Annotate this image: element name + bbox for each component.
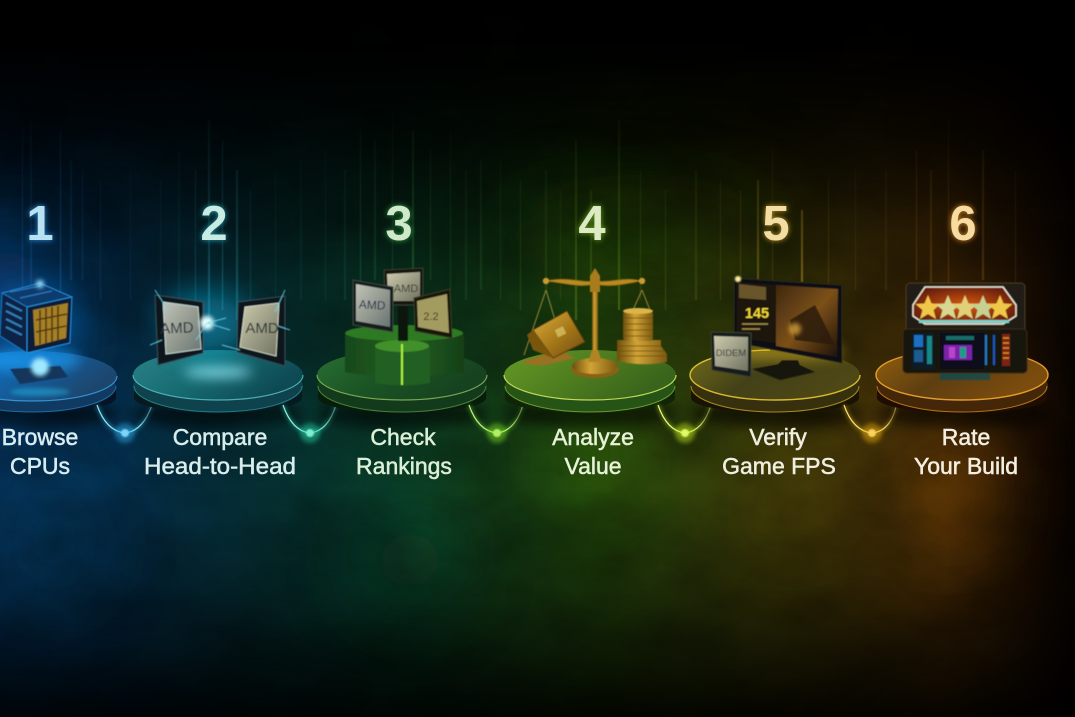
icon: podium with ranked chips — [345, 268, 464, 386]
number 2: 2 — [200, 197, 228, 251]
icon: star rating build panel — [903, 283, 1027, 380]
number 5: 5 — [762, 197, 790, 251]
step 6: Your Build — [914, 453, 1018, 479]
platform 5 — [689, 350, 861, 428]
icon: podium with ranked chips: AMD — [394, 283, 418, 295]
platform 4 — [504, 350, 676, 428]
label 5: Verify — [749, 424, 807, 450]
icon: two AMD chips with spark: AMD — [245, 320, 279, 337]
number 6: 6 — [949, 197, 977, 251]
platform 3 — [316, 350, 488, 428]
icon: monitor and chip with FPS: 145 — [745, 306, 769, 322]
connector 1-2 — [97, 405, 152, 443]
step 1 — [0, 197, 118, 479]
step 2: Head-to-Head — [144, 453, 296, 479]
icon: two AMD chips with spark: AMD — [160, 319, 194, 338]
number 1: 1 — [26, 197, 54, 251]
step 6 — [876, 197, 1048, 479]
number 4: 4 — [578, 197, 606, 251]
light streaks — [22, 110, 1016, 320]
icon: two AMD chips with spark — [150, 289, 290, 366]
label 2: Compare — [173, 424, 267, 450]
connector 2-3 — [283, 405, 336, 443]
label 3: Check — [370, 424, 436, 450]
step 2 — [132, 197, 304, 479]
label 6: Rate — [942, 424, 990, 450]
platform 6 — [876, 350, 1048, 428]
step 1: CPUs — [10, 453, 70, 479]
number 3: 3 — [385, 197, 413, 251]
icon: podium with ranked chips: 2.2 — [423, 311, 439, 323]
label 1: Browse — [2, 424, 78, 450]
connector 5-6 — [844, 405, 896, 443]
platform 1 — [0, 348, 118, 428]
step 3: Rankings — [356, 453, 452, 479]
step 5: Game FPS — [722, 453, 836, 479]
label 4: Analyze — [552, 424, 634, 450]
connector 4-5 — [658, 405, 711, 443]
step 4 — [504, 197, 676, 479]
connector 3-4 — [469, 405, 523, 443]
five stars — [916, 295, 1012, 319]
icon: monitor and chip with FPS — [711, 276, 845, 380]
icon: balance scale with chip and coins — [521, 268, 667, 378]
step 5 — [689, 197, 861, 479]
platform 2 — [132, 350, 304, 428]
icon: monitor and chip with FPS: DIDEM — [716, 348, 746, 359]
icon: podium with ranked chips: AMD — [359, 297, 386, 313]
step 3 — [316, 197, 488, 479]
step 4: Value — [564, 453, 622, 479]
icon: glowing CPU cube — [0, 278, 80, 384]
